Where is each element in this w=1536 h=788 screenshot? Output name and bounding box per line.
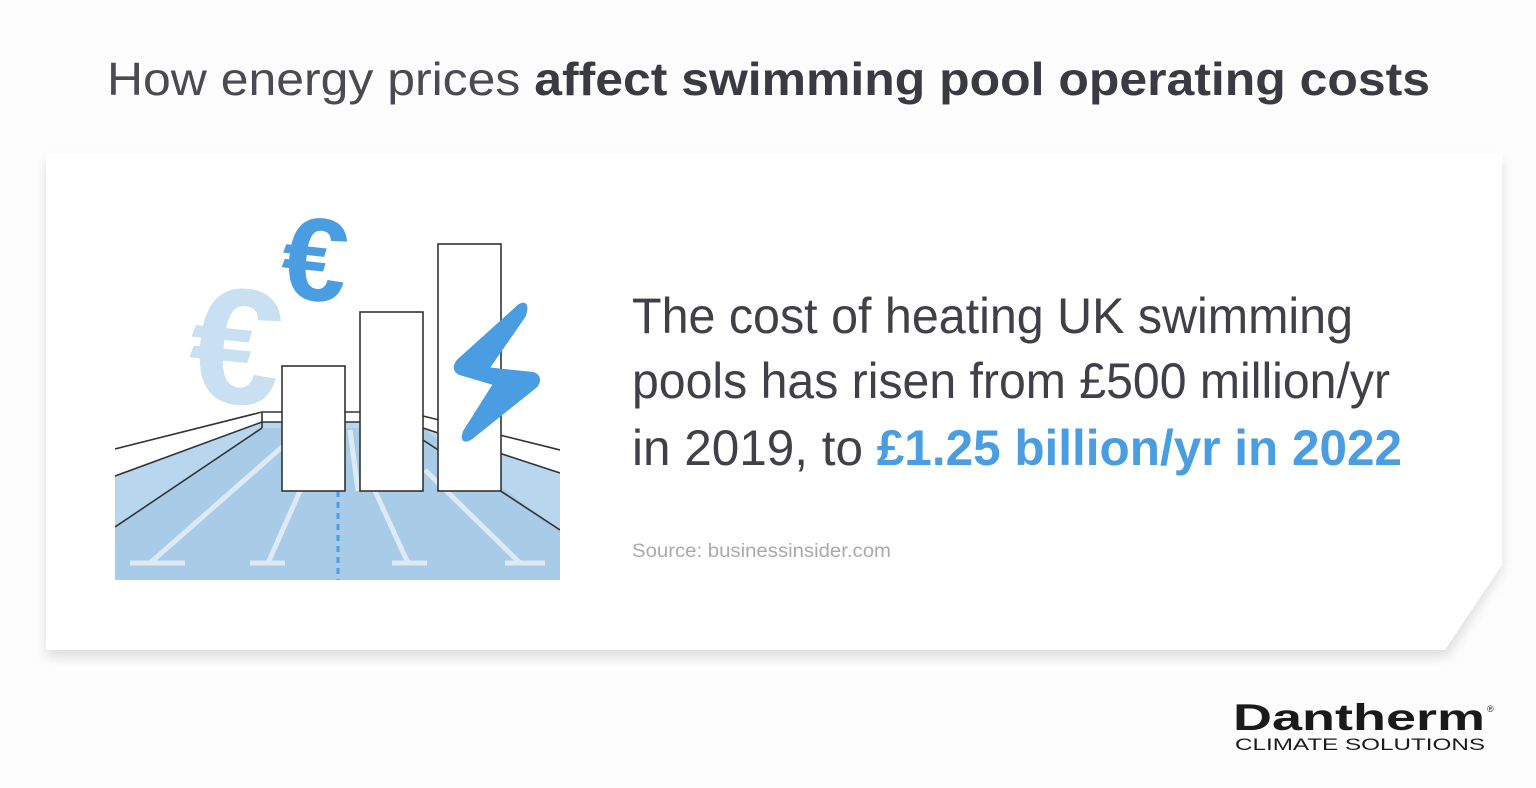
icon: dark euro: €: [275, 191, 354, 329]
dashed center line: [336, 491, 340, 580]
logo: Dantherm: CLIMATE SOLUTIONS: [1235, 735, 1485, 754]
pool floor: [115, 428, 560, 580]
title: How energy prices affect swimming pool operating costs: [107, 53, 1430, 105]
icon: light euro: €: [181, 250, 291, 442]
text block: statistic: pools has risen from £500 million/yr: [632, 353, 1390, 409]
text block: statistic: The cost of heating UK swimming: [632, 288, 1353, 344]
wall lines: [115, 412, 560, 530]
logo: Dantherm: Dantherm: [1233, 697, 1485, 738]
card panel: [46, 153, 1502, 657]
icon: lightning bolt: [457, 306, 537, 439]
lane lines: [130, 430, 545, 563]
text block: statistic: [632, 288, 1402, 476]
logo: Dantherm: ®: [1487, 704, 1494, 714]
illustration: pool with bar chart: [115, 191, 560, 580]
source: Source: businessinsider.com: [632, 541, 891, 562]
bar chart: [282, 244, 501, 491]
logo: Dantherm: [1233, 697, 1494, 754]
text block: statistic: in 2019, to £1.25 billion/yr in 2022: [632, 420, 1402, 476]
